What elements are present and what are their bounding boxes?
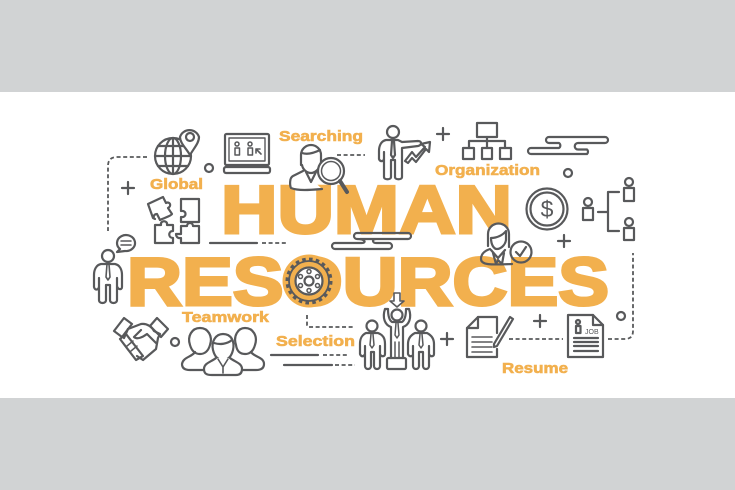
icon: hierarchy of people <box>583 178 634 240</box>
icon: person with speech bubble <box>94 235 135 303</box>
label: Global: Global <box>150 176 203 193</box>
small circle bottom right <box>617 312 625 320</box>
label: Teamwork: Teamwork <box>182 309 270 326</box>
line and dashes under puzzle <box>210 242 287 244</box>
icon: team of three people <box>182 328 264 375</box>
dashes right of the searching icon <box>337 154 365 156</box>
label: Searching: Searching <box>279 128 363 145</box>
icon: handshake <box>114 318 168 360</box>
label: Selection: Selection <box>276 333 355 350</box>
icon: dollar coin: $ <box>541 196 554 222</box>
plus sign top <box>437 128 449 140</box>
icon: puzzle pieces <box>148 197 199 243</box>
dashed connector between documents <box>509 338 563 340</box>
dashed connector top left <box>108 157 147 231</box>
dashed connector bottom right <box>608 253 633 339</box>
icon: dollar coin <box>526 188 568 230</box>
icon: job resume <box>568 315 603 357</box>
icon: laptop with people <box>224 134 270 173</box>
icon: woman with ribbon and check <box>481 224 532 264</box>
lines under selection <box>271 355 355 365</box>
icon: presenter with chart <box>379 126 430 179</box>
icon: globe with pin <box>155 130 199 174</box>
small circle left <box>171 338 179 346</box>
icon: person with magnifier <box>290 145 347 192</box>
icon: gear on orange disc <box>282 254 336 308</box>
dashed connector above selection <box>307 315 355 327</box>
small circle near globe <box>205 164 213 172</box>
plus sign left <box>122 182 134 194</box>
icon: organization chart <box>463 123 511 159</box>
plus sign middle <box>441 333 453 345</box>
plus sign near resume <box>534 315 546 327</box>
label: Organization: Organization <box>435 162 540 179</box>
icon: selected candidate among three people <box>360 293 434 369</box>
small circle right <box>564 169 572 177</box>
title: RESOURCES: RESOURCES <box>127 244 609 320</box>
icon: document and pen <box>467 317 513 357</box>
label: Resume: Resume <box>502 360 568 377</box>
plus sign right <box>558 235 570 247</box>
title: HUMAN: HUMAN <box>221 172 512 248</box>
decorative cloud center <box>332 233 411 249</box>
decorative cloud top right <box>528 137 608 154</box>
icon: job resume: JOB <box>585 329 599 336</box>
